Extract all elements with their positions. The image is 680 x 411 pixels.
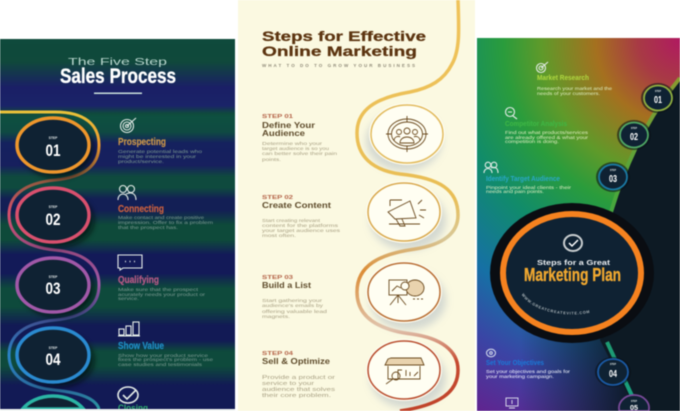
Set Your Objectives text [486,349,571,379]
Competitor Analysis text: competition is doing. [505,139,559,144]
title: Steps for Effective Online Marketing [262,29,427,68]
Connecting text: Connecting [118,204,164,215]
Connecting text: impression. Offer to fix a problem [118,220,214,225]
Identify Target Audience text: needs and pain points. [486,189,544,194]
title: Steps for Effective Online Marketing: Steps for Effective [262,29,427,44]
Show Value text: Show how your product service [118,353,209,358]
step 03 text: audience's emails by [262,303,324,309]
Qualifying text: Make sure that the prospect [118,287,199,292]
Show Value text [118,341,214,367]
panel: marketing plan [476,37,680,411]
step 02 badge [17,188,89,242]
step 04 text: Sell & Optimize [262,357,331,366]
step 01 circle and icon: audience target [369,103,445,165]
title: The Five Step Sales Process [60,56,176,94]
bottom edge strip [0,409,235,411]
step 01 text: STEP 01 [262,114,293,120]
step 02 badge: 02 [46,210,60,229]
Prospecting text [118,137,203,164]
circle shadows [366,111,446,408]
step 04 text [262,351,335,399]
step 01 badge [17,118,89,172]
Prospecting text: product/service. [118,159,164,164]
icon: monitor [506,398,518,408]
Identify Target Audience text [484,162,572,194]
Competitor Analysis text [505,108,589,144]
icon: target [120,118,136,132]
Set Your Objectives text: Set your objectives and goals for [486,369,571,374]
step 04 node: 04 [609,369,617,380]
step 04 text: their core problem. [262,393,332,399]
step 03 badge: 03 [46,279,60,298]
title: The Five Step Sales Process: Sales Process [60,65,176,88]
Connecting text [118,204,214,230]
step 03 text: Build a List [262,281,311,290]
step 01 text: target audience is so you [262,146,329,152]
step 01 text: can better solve their pain [262,151,337,157]
step 02 text: most often. [262,233,296,239]
icon: bar chart [118,322,140,336]
central circle: Marketing Plan [489,202,654,344]
step 04 badge: 04 [46,350,61,369]
Competitor Analysis text: Find out what products/services [505,130,588,135]
step 05 node: STEP [631,400,638,403]
step 01 badge: 01 [46,141,60,160]
green strip [607,78,680,400]
step 03 circle and icon: presentation [366,261,442,323]
step 02 badge: STEP [49,205,58,209]
step 02 node: STEP [631,127,638,130]
Qualifying text [118,275,206,301]
step 03 badge: STEP [49,275,58,279]
step 03 badge [17,258,89,312]
Market Research text: Research your market and the [537,86,613,91]
step 02 text: Create Content [262,201,331,210]
step 04 circle and icon: store [366,339,442,401]
central circle: Marketing Plan: Steps for a Great [537,260,611,267]
Connecting text: that the prospect has. [118,225,178,230]
Market Research text: needs of your customers. [537,91,600,96]
Set Your Objectives text: Set Your Objectives [486,360,544,367]
central circle: Marketing Plan: WWW.GREATCREATEVITE.COM [522,292,590,316]
title: Steps for Effective Online Marketing: Online Marketing [262,44,417,59]
step 04 badge: STEP [49,346,58,350]
step 04 badge [17,328,89,382]
step 03 node: 03 [609,174,617,185]
Competitor Analysis text: Competitor Analysis [505,121,567,128]
step 01 text: Audience [262,129,306,138]
step 01 text: Determine who your [262,141,323,147]
step 03 text: magnets. [262,314,290,320]
step 01 node: 01 [654,95,662,106]
step 01 node: STEP [655,90,662,93]
step 02 text: Start creating relevant [262,218,321,224]
icon: check badge [564,235,582,251]
icon: people [118,186,136,200]
step 05 badge [23,396,83,409]
step 01 text [262,114,337,163]
step 05 node [619,395,649,411]
step 01 text: points. [262,157,281,163]
Show Value text: fixes the prospect's problem - use [118,357,214,362]
ellipse shadows [22,122,94,387]
Connecting text: Make contact and create positive [118,215,205,220]
Prospecting text: Generate potential leads who [118,149,203,154]
step 02 text: content for the platforms [262,223,339,229]
step 02 node [617,120,651,150]
step 02 text [262,195,341,239]
step 03 text: STEP 03 [262,275,293,281]
Identify Target Audience text: Identify Target Audience [486,176,560,183]
icon: check badge [118,387,138,403]
Identify Target Audience text: Pinpoint your ideal clients - their [486,185,572,190]
step 01 badge: STEP [49,136,58,140]
step 03 text: Start gathering your [262,298,323,304]
Market Research text: Market Research [537,75,589,82]
step 02 text: STEP 02 [262,195,293,201]
Show Value text: Show Value [118,341,164,352]
Market Research text [536,62,613,96]
winding path [0,112,99,409]
central circle: Marketing Plan: Marketing Plan [524,265,621,285]
step 04 text: audience that solves [262,387,335,393]
Competitor Analysis text: are already offered & what your [505,135,589,140]
Prospecting text: might be interested in your [118,154,197,159]
step 02 text: your target audience uses [262,228,341,234]
Show Value text: case studies and testimonials [118,362,202,367]
winding ribbon [357,0,459,411]
Qualifying text: acurately needs your product or [118,292,206,297]
dark curved region [600,80,680,411]
step 02 circle and icon: megaphone [366,181,442,243]
step 01 node [641,83,675,113]
title: The Five Step Sales Process: The Five Step [68,56,167,68]
step 03 text [262,275,327,320]
step 03 node: STEP [610,169,617,172]
step 03 text: offering valuable lead [262,309,327,315]
step 04 node [595,357,631,387]
step 02 node: 02 [630,132,638,143]
panel: sales process [0,39,235,411]
Qualifying text: service. [118,296,139,301]
Set Your Objectives text: your marketing campaign. [486,374,554,379]
step 04 text: Provide a product or [262,375,335,381]
Qualifying text: Qualifying [118,275,159,286]
Prospecting text: Prospecting [118,137,166,148]
step 04 node: STEP [610,363,617,366]
icon: chat bubble [118,255,142,270]
panel: online marketing [238,0,475,411]
step 04 text: service to your [262,381,314,387]
step 03 node [596,162,630,192]
title: Steps for Effective Online Marketing: WHAT TO DO TO GROW YOUR BUSINESS [262,63,415,68]
step 04 text: STEP 04 [262,351,294,357]
step 01 text: Define Your [262,121,315,130]
